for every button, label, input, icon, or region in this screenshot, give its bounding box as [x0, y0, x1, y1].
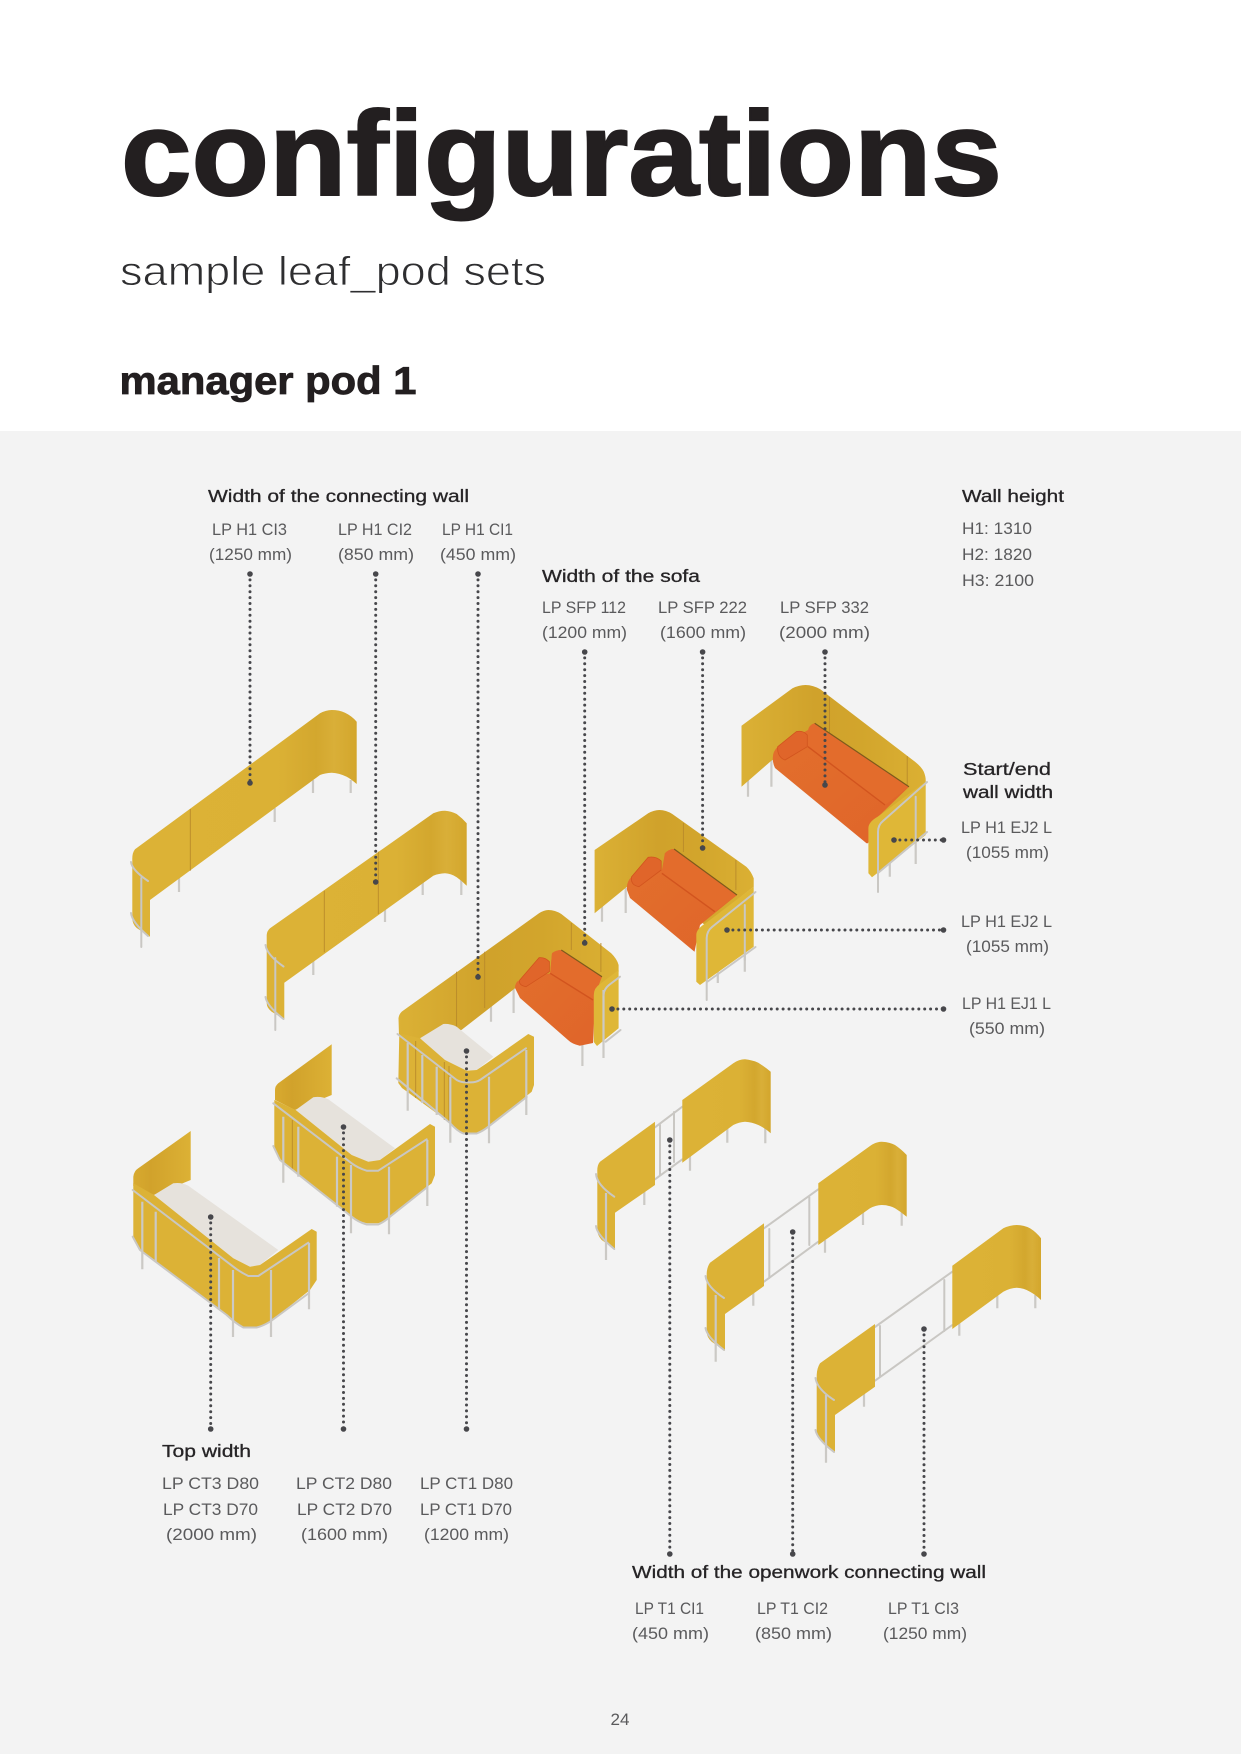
rails and posts [397, 1034, 527, 1134]
label group: start/end wall width: (1055 mm) [966, 843, 1049, 862]
label group: start/end wall width: (1055 mm) [966, 937, 1049, 956]
section heading: manager pod 1 [120, 360, 416, 403]
legs [602, 888, 745, 983]
pod: top 1600 [273, 1044, 435, 1234]
label group: start/end wall width: LP H1 EJ2 L [961, 818, 1052, 837]
end wall [696, 887, 754, 985]
label group: width of the openwork connecting wall: LP T1 CI2 [757, 1599, 828, 1618]
openwork wall CI2 [706, 1142, 907, 1362]
label group: top width: (1200 mm) [424, 1525, 509, 1544]
openwork wall CI3 [816, 1225, 1041, 1463]
label group: top width: (1600 mm) [301, 1525, 388, 1544]
label group: wall height: H3: 2100 [962, 571, 1034, 590]
label group: width of the sofa: (2000 mm) [779, 623, 870, 642]
desk top [154, 1183, 278, 1267]
label group: width of the openwork connecting wall: (1250 mm) [883, 1624, 967, 1643]
label group: width of the openwork connecting wall: LP T1 CI1 [635, 1599, 704, 1618]
open frame [655, 1107, 682, 1179]
label group: width of the connecting wall: (1250 mm) [209, 545, 292, 564]
label group: width of the openwork connecting wall [632, 1562, 986, 1643]
label group: width of the connecting wall: Width of the connecting wall [208, 486, 469, 506]
label group: start/end wall width: LP H1 EJ1 L [962, 994, 1051, 1013]
end wall [868, 782, 926, 877]
title: configurations [121, 87, 1002, 221]
label group: top width: LP CT1 D70 [420, 1500, 512, 1519]
label group: width of the sofa: Width of the sofa [542, 566, 700, 586]
label group: top width: LP CT2 D80 [296, 1474, 392, 1493]
rails and posts [133, 1190, 309, 1328]
label group: start/end wall width: wall width [962, 782, 1053, 802]
legs [491, 985, 582, 1066]
label group: start/end wall width [961, 759, 1053, 1038]
label group: top width: (2000 mm) [166, 1525, 257, 1544]
subtitle: sample leaf_pod sets [120, 248, 546, 294]
open frame [764, 1189, 818, 1282]
leader lines: openwork wall [667, 1137, 927, 1557]
leader lines: sofa [582, 649, 828, 946]
pod: sofa 1200, long wall and top 1200 [397, 910, 620, 1143]
desk top [420, 1024, 493, 1071]
label group: wall height [962, 486, 1064, 590]
desk top [296, 1097, 395, 1162]
label group: width of the connecting wall [208, 486, 516, 564]
pod: sofa 1600 with end wall [595, 810, 756, 1000]
openwork wall CI1 [596, 1059, 771, 1260]
pod: top 2000 [133, 1131, 317, 1337]
open frame [875, 1272, 952, 1381]
connecting wall CI3 [131, 710, 357, 947]
label group: width of the sofa: LP SFP 112 [542, 598, 626, 617]
label group: top width: LP CT1 D80 [420, 1474, 513, 1493]
sofa [627, 849, 737, 952]
label group: top width: LP CT3 D80 [162, 1474, 259, 1493]
sofa [773, 723, 909, 843]
label group: top width: LP CT3 D70 [163, 1500, 258, 1519]
leader lines: connecting wall [247, 571, 481, 980]
label group: width of the openwork connecting wall: LP T1 CI3 [888, 1599, 959, 1618]
label group: start/end wall width: (550 mm) [969, 1019, 1045, 1038]
label group: width of the sofa: LP SFP 222 [658, 598, 747, 617]
front wall [398, 1033, 534, 1133]
label group: top width [162, 1441, 513, 1544]
label group: wall height: H1: 1310 [962, 519, 1032, 538]
label group: start/end wall width: Start/end [963, 759, 1051, 779]
back wall [595, 810, 754, 925]
legs [748, 760, 916, 877]
label group: width of the sofa: (1600 mm) [660, 623, 746, 642]
label group: width of the connecting wall: LP H1 CI2 [338, 520, 412, 539]
label group: width of the sofa: LP SFP 332 [780, 598, 869, 617]
back wall [398, 910, 619, 1040]
rails [707, 892, 756, 1000]
front wall [133, 1183, 317, 1328]
label group: wall height: H2: 1820 [962, 545, 1032, 564]
leader lines: top width [208, 1048, 469, 1432]
back wall [742, 685, 926, 830]
front wall [274, 1100, 435, 1223]
rails and posts [273, 1103, 428, 1224]
label group: width of the connecting wall: LP H1 CI1 [442, 520, 513, 539]
label group: width of the openwork connecting wall: (450 mm) [632, 1624, 709, 1643]
label group: top width: Top width [162, 1441, 251, 1461]
panel: diagram background [0, 431, 1241, 1754]
label group: width of the connecting wall: (850 mm) [338, 545, 414, 564]
pod: sofa 2000 with end wall [742, 685, 927, 892]
sofa [515, 950, 602, 1046]
label group: wall height: Wall height [962, 486, 1064, 506]
leader lines: start/end wall [609, 837, 946, 1012]
label group: width of the openwork connecting wall: (850 mm) [755, 1624, 832, 1643]
back wall [133, 1131, 191, 1195]
label group: width of the connecting wall: LP H1 CI3 [212, 520, 287, 539]
label group: start/end wall width: LP H1 EJ2 L [961, 912, 1052, 931]
label group: top width: LP CT2 D70 [297, 1500, 392, 1519]
connecting wall CI2 [266, 811, 467, 1030]
back wall [275, 1044, 332, 1110]
rails [878, 782, 927, 892]
end wall rail [604, 977, 620, 1042]
end wall [594, 970, 619, 1046]
label group: width of the openwork connecting wall: Width of the openwork connecting wall [632, 1562, 986, 1582]
label group: width of the connecting wall: (450 mm) [440, 545, 516, 564]
label group: width of the sofa: (1200 mm) [542, 623, 627, 642]
page number: 24 [610, 1710, 630, 1729]
label group: width of the sofa [542, 566, 870, 642]
